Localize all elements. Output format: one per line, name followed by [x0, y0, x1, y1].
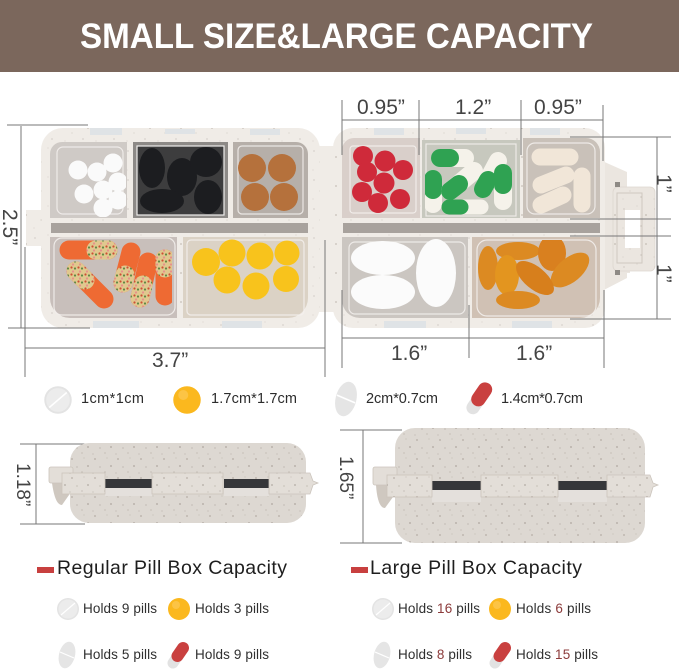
compartment: orange softgels [472, 235, 600, 318]
compartment: cream capsules [523, 138, 600, 218]
side view: large box [335, 428, 658, 543]
dimension: 3.7 in width: 3.7” [152, 349, 188, 372]
icon: round tablet [44, 386, 72, 414]
dimension: right compartment heights: 1” [652, 264, 675, 283]
dimension: bottom compartment widths: 1.6” [391, 342, 427, 365]
regular capacity list [56, 598, 269, 670]
side view: regular box: 1.18” [12, 463, 33, 506]
compartment: white tablets [50, 142, 128, 218]
dimension: top compartment widths [342, 96, 603, 161]
icon: yellow ball [168, 598, 190, 620]
size legend: 1.4cm*0.7cm [501, 391, 583, 407]
heading: regular capacity: Regular Pill Box Capacity [57, 557, 287, 579]
compartment: white oval tablets [342, 237, 468, 318]
icon: oblong tablet [56, 640, 78, 670]
dimension: bottom compartment widths [342, 290, 604, 368]
large capacity list [371, 598, 598, 670]
compartment: orange capsules [50, 237, 177, 318]
heading: large capacity: Large Pill Box Capacity [370, 557, 582, 579]
side view: regular box [12, 443, 318, 524]
compartment: black softgels [133, 142, 228, 218]
regular capacity list: Holds 5 pills [83, 647, 157, 662]
dimension: right compartment heights: 1” [652, 174, 675, 193]
large capacity list: Holds 15 pills [516, 647, 598, 662]
regular capacity list: Holds 9 pills [83, 601, 157, 616]
panel: open large pill box [333, 128, 655, 328]
panel: hinge joining both halves [316, 146, 340, 312]
dimension: top compartment widths: 0.95” [534, 96, 582, 119]
size legend [44, 379, 583, 419]
icon: oblong tablet [371, 640, 393, 670]
compartment: red balls [342, 138, 420, 218]
icon: oblong tablet [332, 379, 360, 419]
compartment: yellow balls [183, 237, 308, 318]
large capacity list: Holds 16 pills [398, 601, 480, 616]
icon: capsule [473, 390, 485, 408]
icon: capsule [495, 648, 505, 663]
dimension: right compartment heights [570, 137, 675, 319]
title: SMALL SIZE&LARGE CAPACITY [80, 17, 593, 56]
dimension: bottom compartment widths: 1.6” [516, 342, 552, 365]
title banner [0, 0, 679, 72]
panel: open regular pill box [26, 128, 320, 328]
compartment: brown tablets [233, 142, 308, 218]
dimension: top compartment widths: 1.2” [455, 96, 491, 119]
icon: capsule [173, 648, 183, 663]
regular capacity list: Holds 3 pills [195, 601, 269, 616]
regular capacity list: Holds 9 pills [195, 647, 269, 662]
side view: large box: 1.65” [335, 456, 356, 499]
size legend: 2cm*0.7cm [366, 391, 438, 407]
large capacity list: Holds 8 pills [398, 647, 472, 662]
dimension: 2.5 in height [0, 125, 90, 328]
large capacity list: Holds 6 pills [516, 601, 591, 616]
icon: round tablet [57, 598, 79, 620]
icon: yellow ball [173, 386, 201, 414]
icon: round tablet [372, 598, 394, 620]
dimension: top compartment widths: 0.95” [357, 96, 405, 119]
size legend: 1.7cm*1.7cm [211, 391, 297, 407]
compartment: green capsules [422, 140, 520, 218]
icon: yellow ball [489, 598, 511, 620]
dimension: 3.7 in width [25, 240, 325, 377]
size legend: 1cm*1cm [81, 391, 144, 407]
